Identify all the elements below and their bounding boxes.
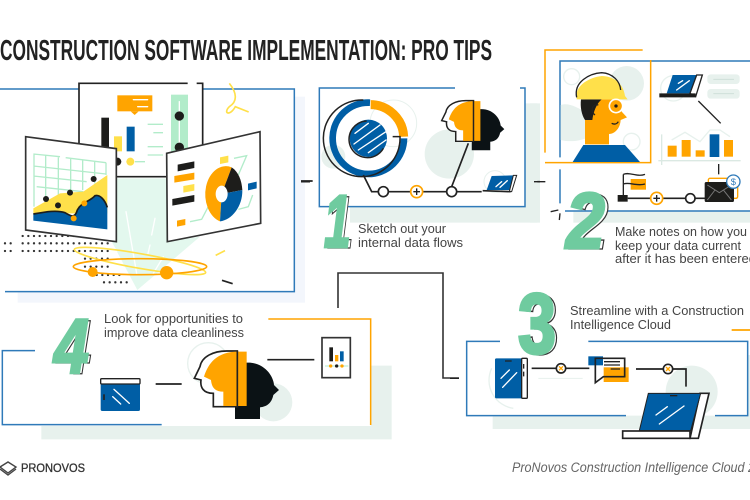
flag and envelope flow: $ — [731, 177, 737, 187]
logo: ProNovos — [0, 462, 85, 475]
panel: tip 4 — [2, 319, 392, 439]
laptop with notes — [659, 74, 740, 123]
text: tip 1: Sketch out your — [358, 221, 447, 236]
number 3: 3 — [521, 278, 559, 373]
donut diagram — [323, 100, 404, 177]
flow nodes — [532, 364, 686, 387]
text: tip 4: Look for opportunities to — [104, 311, 243, 326]
dot pattern — [5, 236, 128, 282]
document chart icon — [322, 338, 350, 378]
text: tip 2: keep your data current — [615, 238, 741, 253]
number 1: 1 — [327, 181, 354, 265]
tablet icon — [101, 379, 140, 411]
text: tip 3: Streamline with a Construction — [570, 303, 744, 318]
text: tip 2: Make notes on how you — [615, 224, 747, 239]
head illustration — [194, 351, 279, 419]
laptop icon — [483, 175, 517, 192]
tablet icon — [495, 358, 527, 398]
number 4: 4 — [55, 305, 92, 390]
text: tip 4: improve data cleanliness — [104, 325, 244, 340]
worker portrait — [573, 73, 640, 162]
yellow squiggle — [227, 83, 249, 113]
number 2: 2 — [568, 178, 609, 266]
data flow line — [363, 143, 482, 198]
text: tip 3: Intelligence Cloud — [570, 317, 671, 332]
number 4: 4 — [52, 304, 89, 389]
laptop icon — [623, 393, 709, 438]
orbit rings — [73, 242, 207, 280]
number 1: 1 — [324, 180, 351, 264]
bar chart — [658, 130, 741, 174]
panel: tip 1 — [301, 88, 540, 223]
back board — [79, 83, 203, 177]
panel: main dashboard illustration — [0, 83, 310, 303]
right donut board — [167, 132, 261, 242]
logo: ProNovos: PRONOVOS — [21, 463, 85, 475]
connector line between tips 3 and 4 — [338, 273, 459, 378]
projector light cone — [112, 178, 200, 290]
panel: tip 3 — [450, 330, 750, 438]
text: tip 1: internal data flows — [358, 235, 464, 250]
chat bubble icon — [588, 356, 629, 383]
number 2: 2 — [564, 177, 605, 265]
head illustration — [442, 101, 504, 150]
left chart board — [26, 137, 116, 242]
number 3: 3 — [518, 277, 556, 372]
panel: tip 2 — [530, 50, 750, 223]
flag and envelope flow — [618, 174, 740, 204]
